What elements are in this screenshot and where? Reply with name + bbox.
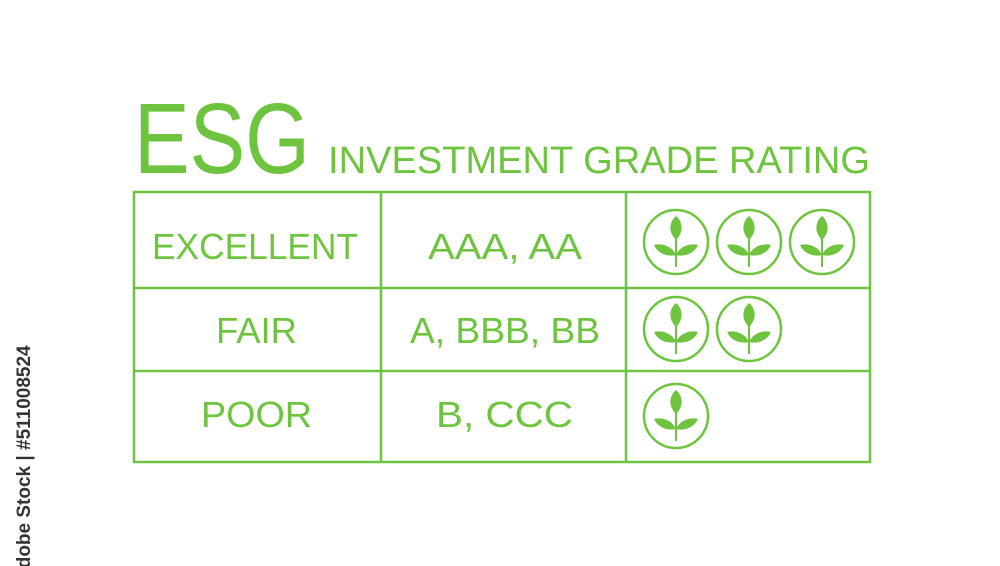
row: excellent: EXCELLENT [152,226,358,267]
row: poor: B, CCC [436,394,573,435]
table [134,192,870,462]
row: excellent: AAA, AA [428,226,582,267]
title: ESG: ESG [134,83,310,195]
row: fair: FAIR [216,310,297,351]
subtitle: investment grade rating: INVESTMENT GRADE RATING [328,140,870,182]
row: poor [201,384,708,448]
row: fair [216,297,781,361]
row: fair: A, BBB, BB [410,310,600,351]
row: poor: POOR [201,394,312,435]
row: excellent [152,210,854,274]
